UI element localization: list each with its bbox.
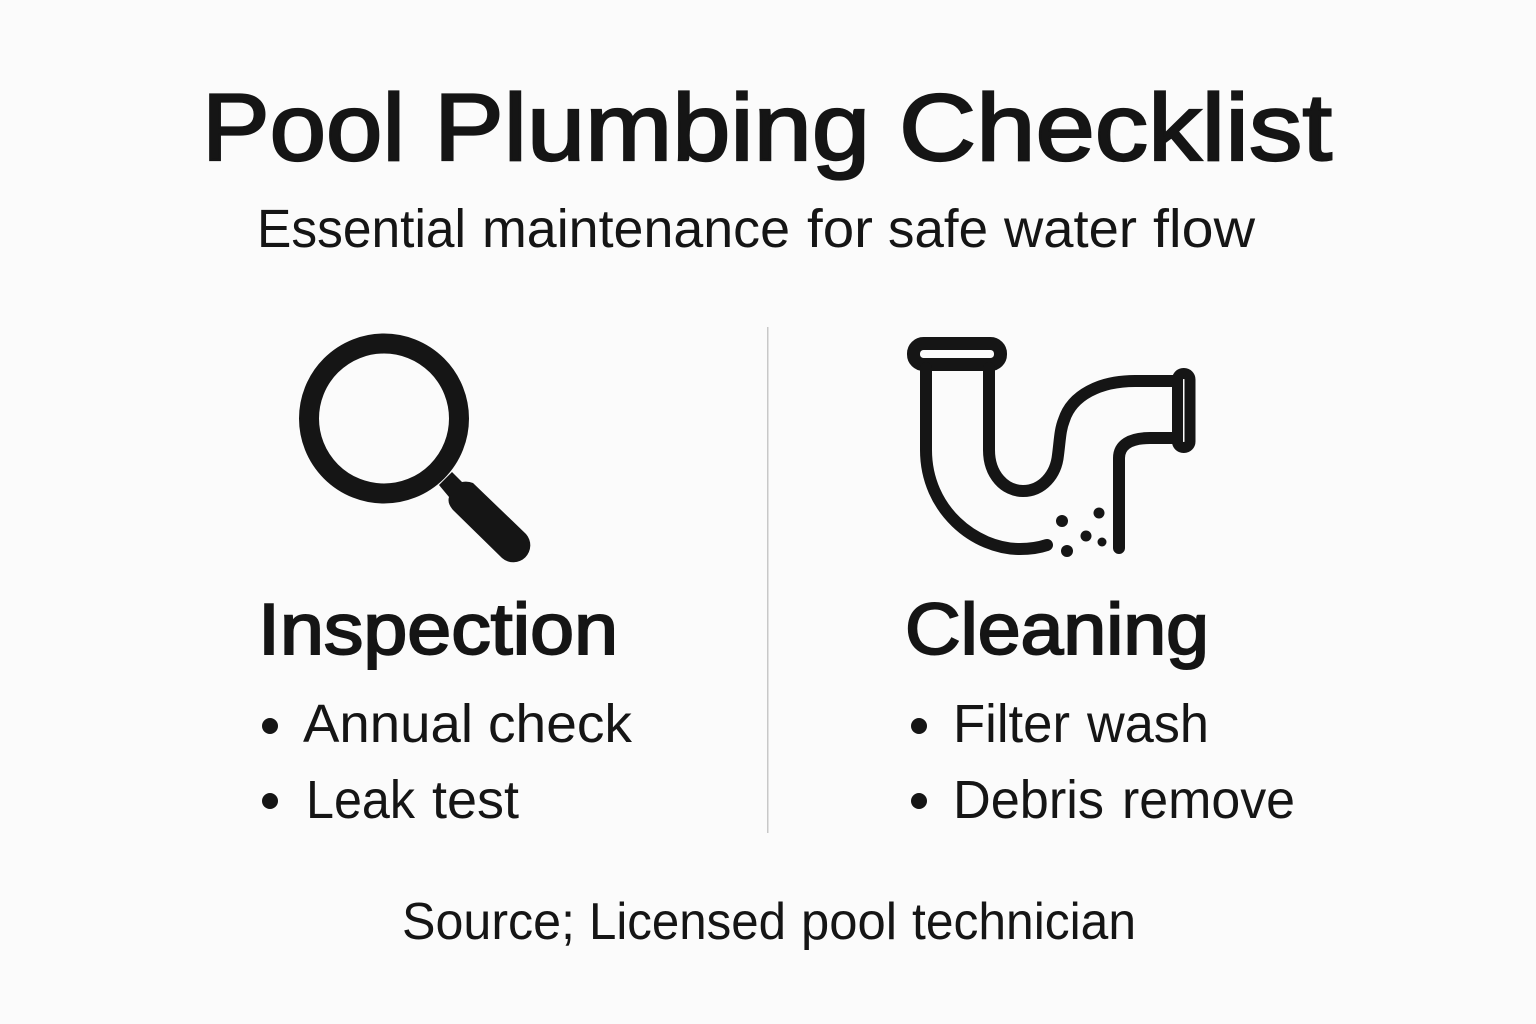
item: annual check: Annual <box>303 694 473 754</box>
bullet: leak test <box>262 793 278 809</box>
list: inspection items <box>262 694 633 830</box>
subtitle <box>257 199 1256 259</box>
source note <box>402 893 1136 951</box>
item: filter wash: wash <box>1086 694 1209 754</box>
title: Checklist <box>899 75 1332 181</box>
item: leak test: test <box>432 770 519 830</box>
heading: cleaning: Cleaning <box>905 590 1209 670</box>
heading: inspection: Inspection <box>258 590 618 670</box>
item: leak test: Leak <box>306 770 416 830</box>
item: annual check: check <box>488 694 633 754</box>
item: annual check <box>303 694 633 754</box>
title: Plumbing <box>434 75 870 181</box>
subtitle: maintenance <box>482 199 790 259</box>
panel: cleaning <box>905 344 1295 830</box>
subtitle: flow <box>1153 199 1256 259</box>
center divider <box>767 327 768 833</box>
item: leak test <box>306 770 519 830</box>
item: debris remove: remove <box>1122 770 1295 830</box>
item: filter wash: Filter <box>953 694 1070 754</box>
item: debris remove: Debris <box>953 770 1104 830</box>
panel: inspection <box>258 344 633 830</box>
source note: Licensed <box>589 893 786 951</box>
icon: leaking pipe <box>914 344 1190 557</box>
item: debris remove <box>953 770 1295 830</box>
bullet: debris remove <box>911 793 927 809</box>
list: cleaning items <box>911 694 1295 830</box>
subtitle: water <box>1003 199 1137 259</box>
source note: Source; <box>402 893 575 951</box>
bullet: filter wash <box>911 718 927 734</box>
item: filter wash <box>953 694 1209 754</box>
title: Pool <box>202 75 405 181</box>
bullet: annual check <box>262 718 278 734</box>
source note: technician <box>912 893 1136 951</box>
subtitle: safe <box>888 199 988 259</box>
icon: magnifying glass <box>309 344 530 562</box>
title <box>202 75 1332 181</box>
subtitle: Essential <box>257 199 466 259</box>
subtitle: for <box>807 199 873 259</box>
source note: pool <box>801 893 897 951</box>
